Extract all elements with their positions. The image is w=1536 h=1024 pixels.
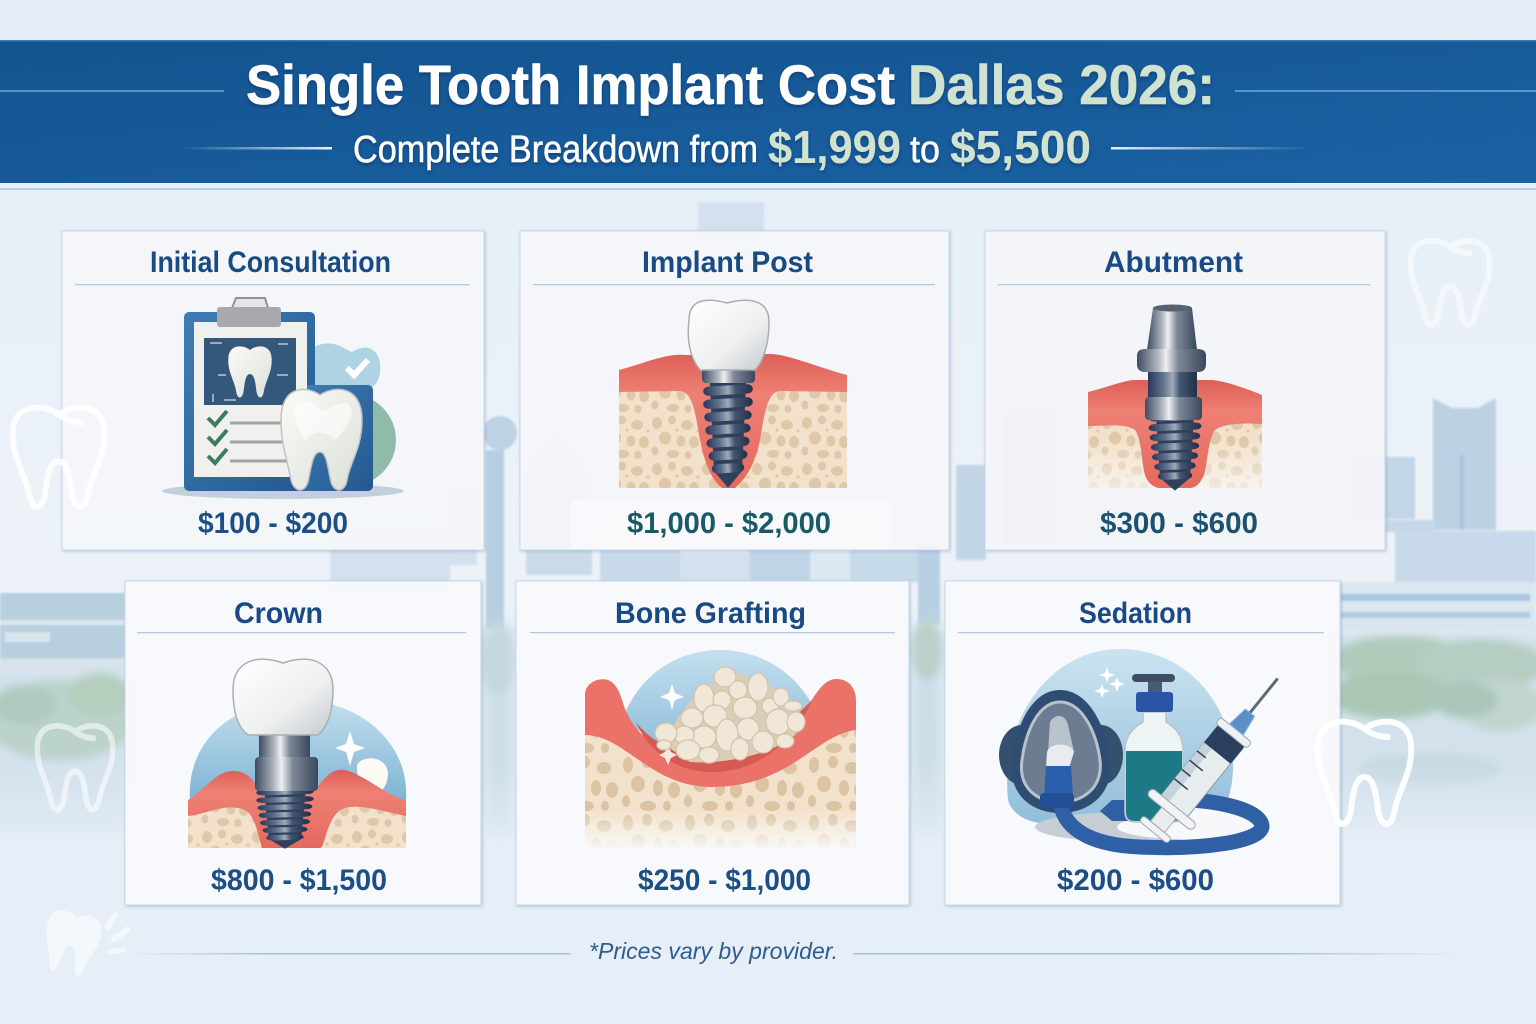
subtitle <box>353 121 1091 173</box>
price: initial consultation: $100 - $200 <box>198 507 348 540</box>
vial <box>1125 674 1183 822</box>
price: sedation: $200 - $600 <box>1057 864 1214 897</box>
title: Single Tooth Implant Cost <box>246 53 895 116</box>
heading: initial consultation: Initial Consultation <box>150 246 391 279</box>
mask <box>999 690 1123 813</box>
panel: abutment <box>985 231 1385 550</box>
ghost tooth outline: left <box>13 408 104 507</box>
panel: implant post <box>520 231 949 550</box>
subtitle: $5,500 <box>950 121 1091 173</box>
panel: crown <box>125 581 481 905</box>
heading: crown: Crown <box>234 597 323 630</box>
icon: crown on implant <box>188 659 406 849</box>
ghost tooth outline: top right <box>1410 241 1490 325</box>
subtitle: Complete Breakdown from <box>353 129 758 171</box>
subtitle: to <box>910 129 940 171</box>
panel: sedation <box>945 581 1340 905</box>
heading: bone grafting: Bone Grafting <box>615 597 806 630</box>
icon: mask, vial and syringe <box>999 649 1300 851</box>
tube <box>1060 800 1262 848</box>
sparkles <box>1094 667 1125 698</box>
icon: clipboard and tooth <box>162 298 404 499</box>
icon: implant in gum <box>619 300 847 488</box>
header banner <box>0 40 1536 190</box>
price: abutment: $300 - $600 <box>1100 507 1258 540</box>
dallas skyline background <box>0 202 1536 835</box>
title: Dallas 2026: <box>908 53 1215 116</box>
icon: bone graft in socket <box>585 650 856 850</box>
heading: abutment: Abutment <box>1104 246 1243 279</box>
panel: initial consultation <box>62 231 484 550</box>
heading: sedation: Sedation <box>1079 597 1192 630</box>
subtitle: $1,999 <box>768 121 901 173</box>
price: bone grafting: $250 - $1,000 <box>638 864 811 897</box>
price: implant post: $1,000 - $2,000 <box>627 507 831 540</box>
panel: bone grafting <box>516 581 909 905</box>
syringe <box>1131 660 1300 851</box>
price: crown: $800 - $1,500 <box>211 864 387 897</box>
ghost tooth outline: lower left <box>37 726 113 810</box>
footnote: *Prices vary by provider. <box>589 938 838 964</box>
ghost tooth outline: lower right <box>1318 722 1411 824</box>
ghost tooth icon: bottom left with sparkle <box>38 907 131 979</box>
icon: abutment on implant <box>1088 304 1262 491</box>
heading: implant post: Implant Post <box>642 246 813 279</box>
